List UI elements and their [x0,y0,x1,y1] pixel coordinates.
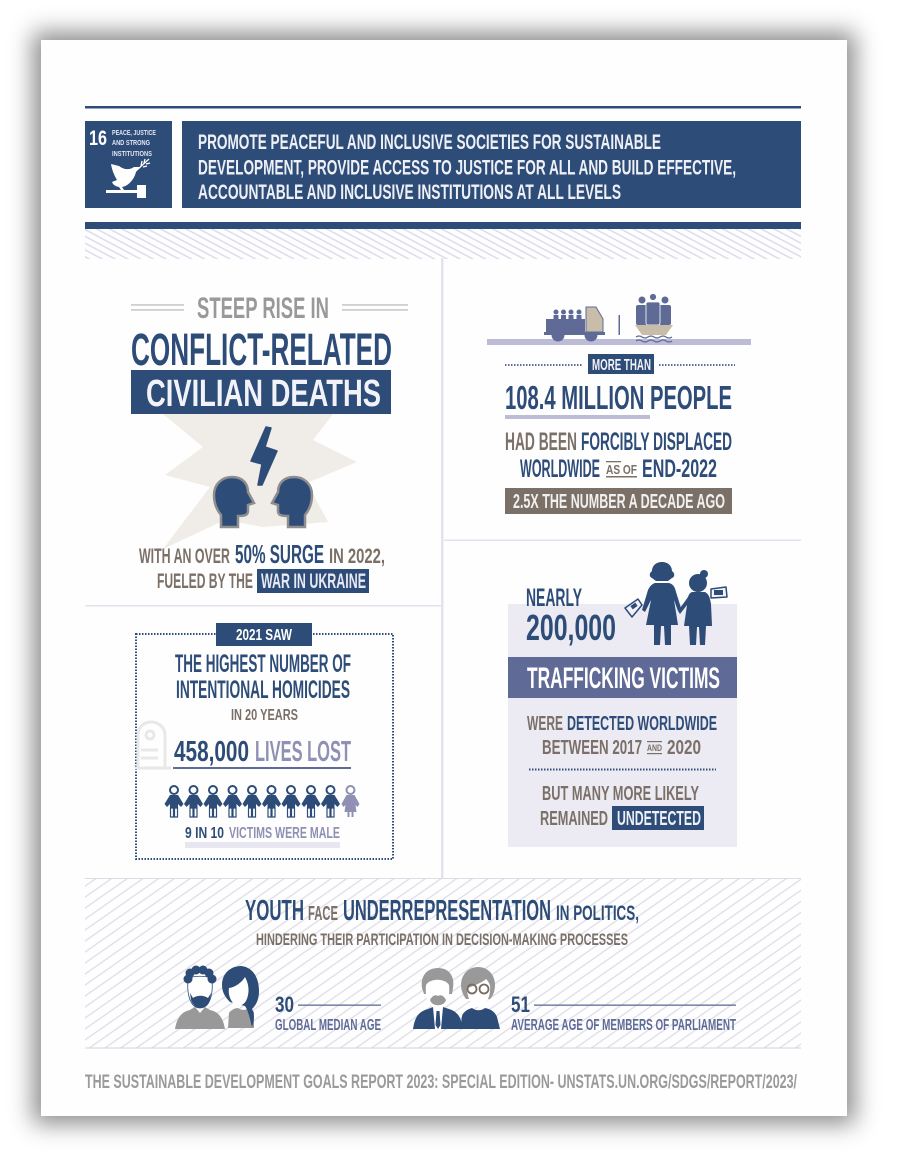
icon: woman and child with tags [625,562,727,645]
heading: highest number: THE HIGHEST NUMBER OF [175,650,351,678]
callout: 2.5x a decade ago: 2.5X THE NUMBER A DECADE AGO [513,491,725,513]
pictogram: 9 in 10 victims [164,786,360,817]
text: over 50% surge: FUELED BY THE [157,570,253,593]
separator [618,315,620,335]
text: over 50% surge: WAR IN UKRAINE [261,570,366,593]
stat: parliament age: AVERAGE AGE OF MEMBERS OF PARLIAMENT [511,1017,736,1034]
subheading: decision-making: HINDERING THEIR PARTICIPATION IN DECISION-MAKING PROCESSES [256,930,628,949]
heading: highest number: INTENTIONAL HOMICIDES [176,676,350,704]
text: forcibly displaced: HAD BEEN [505,428,577,456]
SDG 16 badge: 16 [89,127,107,150]
stat: 458,000 lives lost: 458,000 [174,736,249,768]
text: forcibly displaced: FORCIBLY DISPLACED [581,428,732,456]
heading: youth underrepresentation: FACE [308,903,338,925]
text: over 50% surge: IN 2022, [329,545,385,568]
callout: 2.5x a decade ago [505,488,732,514]
text: remained undetected: BUT MANY MORE LIKELY [542,782,699,805]
heading: youth underrepresentation [245,895,639,927]
dotted divider [529,768,716,770]
icon: truck [544,307,605,342]
text: detected worldwide: WERE [527,712,563,735]
icon: tombstone [135,722,171,768]
hatched strip [85,229,801,259]
icon: older man and woman [413,967,500,1029]
heading: steep rise in: STEEP RISE IN [197,292,329,325]
text: remained undetected: REMAINED [540,807,608,830]
goal statement banner: ACCOUNTABLE AND INCLUSIVE INSTITUTIONS AT ALL LEVELS [198,180,621,204]
heading: highest number: IN 20 YEARS [231,707,298,724]
heading: civilian deaths: CIVILIAN DEATHS [146,373,381,415]
panel: youth representation [85,878,801,1048]
SDG 16 badge: PEACE, JUSTICE [112,130,156,137]
label: 2021 saw: 2021 SAW [236,627,292,644]
stat: 108.4 million people [505,379,732,419]
ground band [487,339,751,345]
heading: youth underrepresentation: IN POLITICS, [556,902,639,925]
panel: civilian deaths [131,292,408,593]
top rule [85,106,801,108]
stat: nearly 200,000: NEARLY [526,584,582,612]
SDG 16 badge [85,121,172,208]
text: over 50% surge: WITH AN OVER [139,545,230,568]
text: 9 in 10 male: 9 IN 10 [185,825,224,842]
text: forcibly displaced: WORLDWIDE [520,455,600,483]
goal statement banner [182,121,801,208]
icon: burst star [163,414,357,549]
text: over 50% surge [139,539,385,593]
stat: parliament age: 51 [511,992,530,1017]
icon: lightning bolt [251,427,277,485]
stat: 458,000 lives lost: LIVES LOST [255,736,351,768]
icon: two heads [214,477,312,527]
text: detected worldwide: DETECTED WORLDWIDE [567,712,717,735]
heading: conflict-related: CONFLICT-RELATED [131,324,392,375]
text: 9 in 10 male [185,825,340,848]
SDG 16 badge: INSTITUTIONS [112,151,152,158]
heading: youth underrepresentation: UNDERREPRESENTATION [343,895,551,927]
text: forcibly displaced: END-2022 [642,455,717,483]
panel: displaced people [487,294,751,514]
hatched background [85,878,801,1048]
stat: global median age [275,992,381,1034]
stat: 108.4 million people: 108.4 MILLION PEOPLE [505,379,732,416]
text: detected worldwide [527,712,717,759]
text: remained undetected [540,782,704,830]
band: trafficking victims [508,657,737,698]
SDG 16 badge: AND STRONG [112,140,150,147]
text: 9 in 10 male: VICTIMS WERE MALE [229,825,340,842]
label: more than [505,354,735,374]
text: detected worldwide: BETWEEN 2017 [542,736,642,759]
text: forcibly displaced: AS OF [606,462,637,477]
heading: youth underrepresentation: YOUTH [245,895,304,927]
text: remained undetected: UNDETECTED [617,807,701,830]
dotted frame [136,634,393,859]
text: over 50% surge: 50% SURGE [235,539,324,569]
text: detected worldwide: 2020 [667,736,701,759]
panel: trafficking [508,562,737,847]
label: more than: MORE THAN [592,357,651,374]
stat: nearly 200,000 [526,584,616,648]
icon: boat with people [635,294,673,342]
stat: 458,000 lives lost [173,736,351,769]
icon: young man and woman [175,966,259,1029]
stat: global median age: GLOBAL MEDIAN AGE [275,1017,381,1034]
stat: parliament age [511,992,736,1034]
stat: global median age: 30 [275,992,294,1017]
thick header bar [85,222,801,229]
text: detected worldwide: AND [647,743,662,753]
stat: nearly 200,000: 200,000 [526,607,616,648]
label: 2021 saw [216,623,312,646]
background panel [508,604,737,847]
panel: homicides [135,623,393,859]
heading: highest number [175,650,351,724]
text: forcibly displaced [505,428,732,483]
panel dividers [85,258,801,878]
band: trafficking victims: TRAFFICKING VICTIMS [527,662,720,695]
heading: civilian deaths [131,370,391,415]
